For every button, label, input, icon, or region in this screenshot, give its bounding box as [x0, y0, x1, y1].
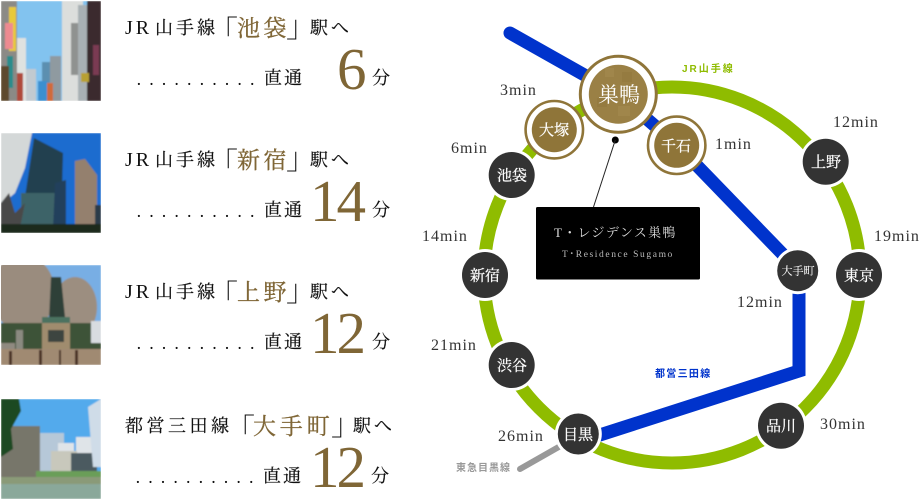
travel times: 19min	[874, 228, 920, 245]
travel times: 1min	[715, 136, 752, 153]
row: Ueno 12 min: 山手線	[155, 282, 218, 302]
station: Shibuya	[486, 339, 538, 391]
row: Shinjuku 14 min	[125, 143, 390, 234]
station: Meguro	[555, 410, 602, 458]
row: Shinjuku 14 min: 」	[286, 143, 316, 176]
row: Ikebukuro 6 min	[125, 11, 390, 102]
line label: Toei Mita: 都営三田線	[655, 367, 712, 380]
station: Tokyo	[833, 249, 885, 301]
station: Sengoku	[648, 117, 705, 174]
station: Sugamo	[580, 56, 656, 132]
row: Otemachi 12 min: 」	[331, 409, 361, 442]
row: Otemachi 12 min: 分	[371, 466, 389, 486]
row: Otemachi 12 min: 12	[310, 434, 364, 500]
station: Shinjuku	[459, 249, 511, 301]
station: Meguro: 目黒	[563, 426, 594, 444]
row: Shinjuku 14 min: 分	[372, 200, 390, 220]
travel times: 21min	[431, 337, 477, 354]
row: Ueno 12 min: 12	[310, 300, 364, 366]
travel times: 12min	[833, 114, 879, 131]
station: Sugamo: 巣鴨	[598, 83, 640, 107]
row: Ueno 12 min: JR	[125, 281, 152, 303]
station: Sengoku: 千石	[661, 138, 691, 155]
station: Shibuya: 渋谷	[497, 358, 527, 374]
JR Yamanote line ring	[484, 87, 860, 463]
row: Ueno 12 min: 駅へ	[309, 282, 352, 302]
row: Ikebukuro 6 min: 6	[337, 36, 366, 102]
row: Otemachi 12 min: 直通	[263, 466, 303, 486]
Toei Mita line	[510, 33, 799, 442]
photo: Ikebukuro street	[1, 1, 101, 101]
Tokyu Meguro line	[520, 436, 578, 469]
row: Otemachi 12 min: 「	[225, 414, 255, 447]
station: Shinagawa: 品川	[766, 418, 796, 435]
callout: T-Residence Sugamo: T･Residence Sugamo	[562, 250, 674, 260]
station: Ueno	[800, 136, 852, 188]
row: Ueno 12 min: ..........	[137, 333, 263, 353]
line label: Tokyu Meguro: 東急目黒線	[456, 461, 511, 474]
photo: Shinjuku towers	[1, 133, 101, 233]
row: Ueno 12 min: 上野	[237, 280, 290, 305]
photo: Ueno statue	[1, 265, 101, 365]
travel times	[422, 82, 920, 445]
row: Ikebukuro 6 min: 山手線	[155, 18, 218, 38]
row: Otemachi 12 min: 大手町	[253, 414, 333, 439]
station: Ikebukuro	[486, 149, 538, 201]
row: Otemachi 12 min: 駅へ	[352, 416, 395, 436]
row: Ueno 12 min: 直通	[264, 332, 304, 352]
row: Ikebukuro 6 min: JR	[125, 17, 152, 39]
station: Ueno: 上野	[811, 154, 841, 171]
row: Ikebukuro 6 min: 「	[208, 16, 238, 49]
station: Shinjuku: 新宿	[470, 266, 500, 284]
station: Ikebukuro: 池袋	[497, 166, 527, 184]
row: Shinjuku 14 min: 山手線	[155, 150, 218, 170]
row: Shinjuku 14 min: JR	[125, 149, 152, 171]
row: Ueno 12 min: 」	[286, 275, 316, 308]
station: Otemachi	[774, 247, 821, 294]
travel times: 30min	[820, 416, 866, 433]
travel times: 3min	[500, 82, 537, 99]
travel times: 14min	[422, 228, 468, 245]
travel times: 12min	[737, 294, 783, 311]
row: Otemachi 12 min	[125, 409, 395, 500]
travel times: 26min	[498, 428, 544, 445]
row: Shinjuku 14 min: 「	[208, 148, 238, 181]
row: Otemachi 12 min: ..........	[136, 467, 262, 487]
callout: T-Residence Sugamo: T・レジデンス巣鴨	[554, 225, 677, 240]
row: Ueno 12 min	[125, 275, 390, 366]
row: Ikebukuro 6 min: 直通	[264, 68, 304, 88]
row: Shinjuku 14 min: 14	[310, 168, 366, 234]
row: Ikebukuro 6 min: 駅へ	[309, 18, 352, 38]
station: Tokyo: 東京	[844, 268, 874, 284]
row: Ikebukuro 6 min: 池袋	[237, 16, 290, 41]
row: Otemachi 12 min: 都営三田線	[125, 416, 232, 436]
line label: JR Yamanote: JR山手線	[682, 62, 735, 75]
row: Shinjuku 14 min: 駅へ	[309, 150, 352, 170]
row: Ueno 12 min: 「	[208, 280, 238, 313]
station: Shinagawa	[755, 400, 807, 452]
station: Otsuka: 大塚	[539, 122, 569, 139]
row: Shinjuku 14 min: 直通	[264, 200, 304, 220]
callout: T-Residence Sugamo	[536, 136, 700, 280]
row: Shinjuku 14 min: 新宿	[237, 148, 290, 173]
row: Ueno 12 min: 分	[372, 332, 390, 352]
row: Ikebukuro 6 min: 」	[286, 11, 316, 44]
photo: Otemachi moat	[1, 399, 101, 499]
station: Otsuka	[526, 101, 583, 158]
station: Otemachi: 大手町	[782, 264, 814, 278]
travel times: 6min	[451, 140, 488, 157]
row: Ikebukuro 6 min: 分	[372, 68, 390, 88]
row: Shinjuku 14 min: ..........	[137, 201, 263, 221]
row: Ikebukuro 6 min: ..........	[137, 69, 263, 89]
